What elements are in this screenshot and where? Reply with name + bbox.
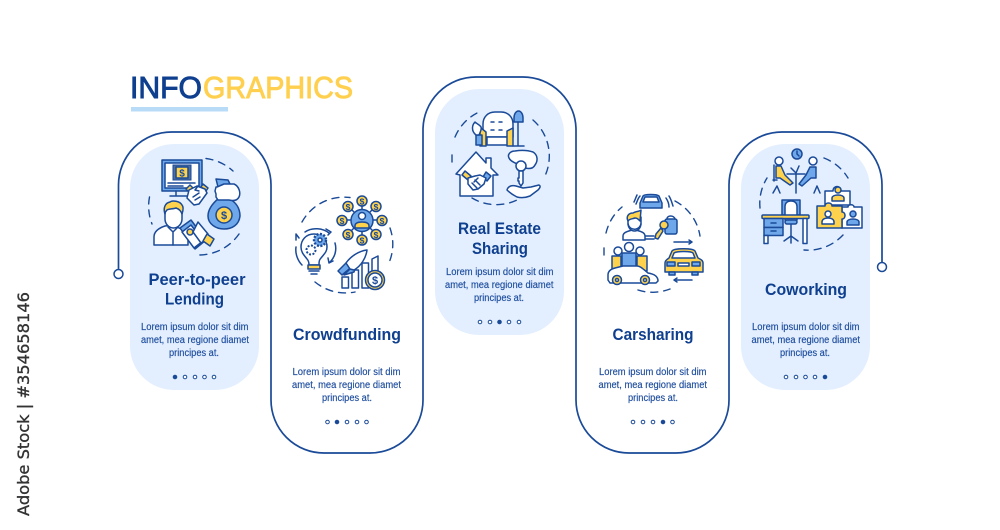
panel text: real estate sharing: principes at. [474,293,524,304]
icon: crowdfunding: $ [360,236,365,246]
panel: coworking background [741,144,870,390]
icon: crowdfunding: $ [374,230,379,240]
panel text: crowdfunding: Crowdfunding [293,326,401,344]
icon: crowdfunding: $ [360,196,365,206]
icon: crowdfunding: $ [380,216,385,226]
icon: crowdfunding: $ [374,202,379,212]
panel text: carsharing [598,326,707,404]
panel text: carsharing: Carsharing [612,326,694,344]
icon: crowdfunding: $ [346,230,351,240]
icon: real estate sharing [452,111,549,205]
panel text: real estate sharing: amet, mea regione diamet [445,280,554,291]
icon: peer-to-peer lending: $ [221,210,227,222]
icon: crowdfunding: $ [372,275,378,287]
panel text: real estate sharing [445,220,554,304]
panel text: coworking: Lorem ipsum dolor sit dim [752,322,860,333]
pagination dots: step 4 [631,420,674,424]
panel text: peer-to-peer lending: amet, mea regione diamet [141,335,249,346]
title [130,71,353,112]
icon: carsharing [604,194,703,292]
panel text: crowdfunding: Lorem ipsum dolor sit dim [292,367,400,378]
icon: crowdfunding: $ [346,202,351,212]
icon: crowdfunding: $ [340,216,345,226]
pagination dots: step 1 [173,375,216,379]
icon: peer-to-peer lending [149,158,240,255]
panel text: coworking: amet, mea regione diamet [752,335,860,346]
panel text: coworking: Coworking [765,281,847,299]
panel text: crowdfunding [292,326,401,404]
panel text: coworking [752,281,860,359]
panel: real estate background [435,89,564,335]
pagination dots: step 3 [478,320,521,324]
stock id sidebar text: Adobe Stock | #354658146 [14,292,33,516]
pagination dots: step 2 [326,420,368,424]
title: GRAPHICS [203,71,353,105]
panel text: coworking: principes at. [780,348,830,359]
icon: crowdfunding [296,196,393,293]
left connector node [114,270,123,278]
icon: peer-to-peer lending: $ [179,168,185,180]
panel text: peer-to-peer lending: principes at. [169,348,219,359]
panel text: real estate sharing: Lorem ipsum dolor sit dim [446,267,554,278]
panel text: peer-to-peer lending: Lorem ipsum dolor sit dim [141,322,248,333]
panel text: crowdfunding: amet, mea regione diamet [292,380,401,391]
panel text: carsharing: principes at. [628,393,678,404]
icon: coworking [760,149,862,250]
right connector node [878,262,886,272]
title: INFO [130,71,202,105]
connecting outline [118,77,882,453]
panel text: real estate sharing: Sharing [472,240,528,258]
panel text: peer-to-peer lending: Lending [165,290,224,308]
panel text: peer-to-peer lending [141,271,249,359]
panel text: carsharing: Lorem ipsum dolor sit dim [599,367,706,378]
panel text: peer-to-peer lending: Peer-to-peer [148,271,246,289]
panel: lending background [130,144,259,390]
panel text: crowdfunding: principes at. [322,393,372,404]
panel text: real estate sharing: Real Estate [458,220,541,238]
panel text: carsharing: amet, mea regione diamet [598,380,707,391]
pagination dots: step 5 [784,375,827,379]
